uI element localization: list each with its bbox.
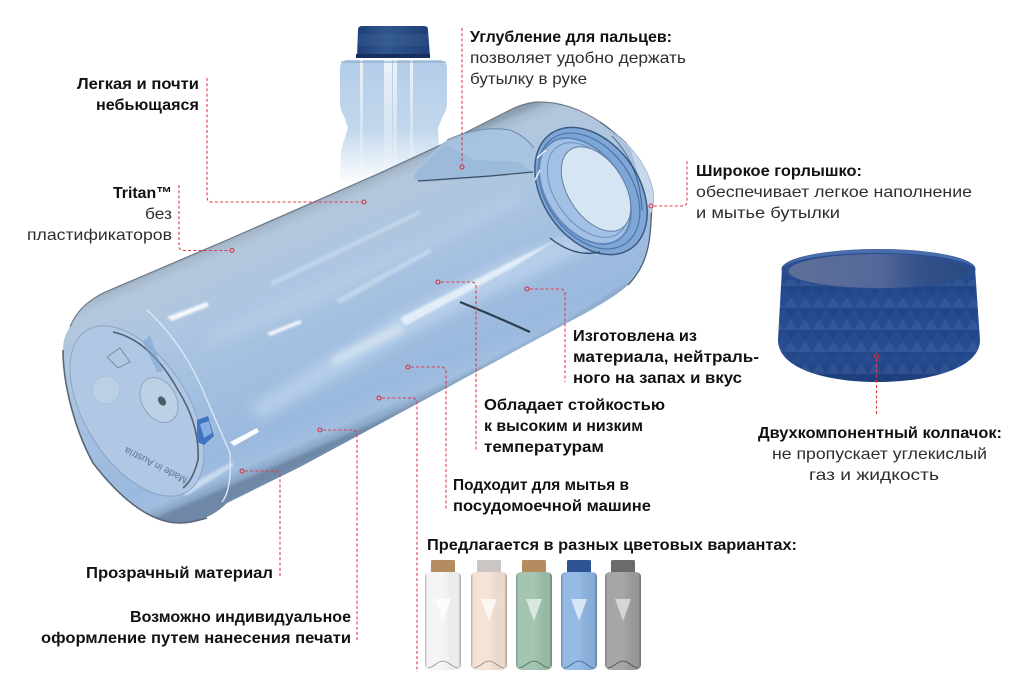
callout: Прозрачный материал: Прозрачный материал: [86, 565, 273, 582]
callout: Возможно индивидуальное оформление: Возможно индивидуальное: [130, 609, 351, 626]
callout: Углубление для пальцев: Углубление для пальцев:: [470, 29, 672, 46]
callout: Подходит для мытья: Подходит для мытья в: [453, 477, 629, 494]
leader dot: [377, 396, 381, 400]
callout: Tritan: Tritan™: [113, 185, 172, 202]
callout: Двухкомпонентный колпачок: [758, 354, 1002, 484]
bottle top edge and contour: [70, 102, 600, 327]
callout: Легкая и почти небьющаяся: Легкая и почти: [77, 76, 199, 93]
callout: Двухкомпонентный колпачок: Двухкомпонентный колпачок:: [758, 425, 1002, 442]
callout: Возможно индивидуальное оформление: оформление путем нанесения печати: [41, 630, 351, 647]
callout: Изготовлена из материала: Изготовлена из: [573, 328, 697, 345]
callout: Tritan: пластификаторов: [27, 227, 172, 244]
callout: Обладает стойкостью: температурам: [484, 439, 604, 456]
callout: Обладает стойкостью: к высоким и низким: [484, 418, 643, 435]
leader to colour variants: [382, 398, 417, 672]
callout: Углубление для пальцев: позволяет удобно держать: [470, 50, 686, 67]
callout: Обладает стойкостью: [436, 280, 665, 456]
callout: Двухкомпонентный колпачок: не пропускает углекислый: [772, 446, 987, 463]
callout: Подходит для мытья: [406, 365, 651, 515]
callout: Широкое горлышко: и мытье бутылки: [696, 205, 840, 222]
callout: Легкая и почти небьющаяся: [77, 76, 366, 204]
wide neck ring: [512, 106, 670, 276]
finger recess: [413, 128, 537, 182]
callout: Tritan: без: [145, 206, 172, 223]
colour variant: grey: [605, 560, 641, 670]
callout: Широкое горлышко: обеспечивает легкое наполнение: [696, 184, 972, 201]
callout: Изготовлена из материала: материала, нейтраль-: [573, 349, 759, 366]
bottle mouth opening: [547, 134, 645, 244]
body highlights: [167, 210, 588, 496]
callout: Возможно индивидуальное оформление: [41, 428, 357, 647]
base embossed text: Made in Austria: [123, 444, 189, 485]
callout: Изготовлена из материала: ного на запах и вкус: [573, 370, 742, 387]
callout: Подходит для мытья: посудомоечной машине: [453, 498, 651, 515]
callout: Легкая и почти небьющаяся: небьющаяся: [96, 97, 199, 114]
callout: Широкое горлышко: [649, 160, 972, 222]
cap: two-component lid: [775, 249, 985, 382]
icon: blue gate mark: [197, 416, 214, 445]
main bottle lying on its side: [43, 102, 670, 523]
callout: Углубление для пальцев: бутылку в руке: [470, 71, 587, 88]
colour variant: peach: [471, 560, 507, 670]
callout: Изготовлена из материала: [525, 287, 759, 387]
callout: Обладает стойкостью: Обладает стойкостью: [484, 397, 665, 414]
lower grip slash: [460, 302, 530, 332]
heading: colour variants: Предлагается в разных цветовых вариантах:: [427, 537, 797, 554]
colour variant: green: [516, 560, 552, 670]
colour variant: blue: [561, 560, 597, 670]
colour variant: clear: [425, 560, 461, 670]
background bottle standing behind: [340, 26, 447, 185]
callout: Прозрачный материал: [86, 469, 280, 582]
callout: Tritan: [27, 185, 234, 252]
bottle base end: [43, 303, 231, 519]
icon: background bottle cap: [356, 26, 430, 58]
callout: Широкое горлышко: Широкое горлышко:: [696, 163, 862, 180]
callout: Двухкомпонентный колпачок: газ и жидкость: [809, 467, 939, 484]
callout: Углубление для пальцев: [460, 28, 686, 169]
